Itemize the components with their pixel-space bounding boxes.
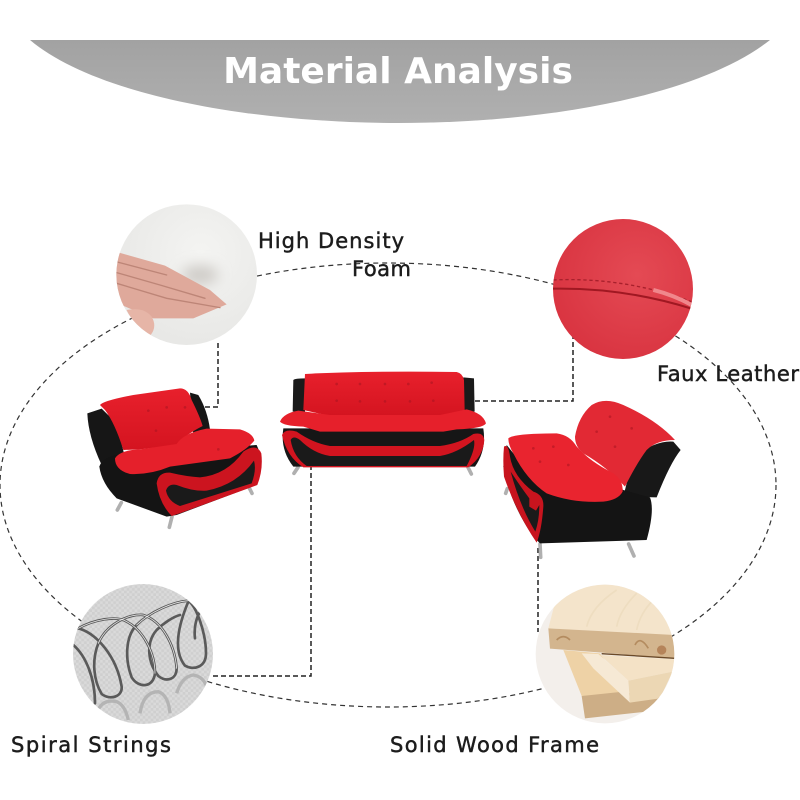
loveseat: [503, 401, 681, 557]
title text: Material Analysis: [223, 51, 573, 92]
label: faux leather: Faux Leather: [657, 362, 799, 386]
label: high density foam: Foam: [352, 257, 411, 281]
dashed oval linking the materials: [0, 263, 776, 707]
title banner: [30, 40, 770, 123]
icon: hand pressing foam: [113, 251, 227, 335]
lower left plank: [564, 650, 619, 696]
sofa: [280, 372, 486, 474]
label: solid wood frame: Solid Wood Frame: [390, 733, 599, 757]
material circle: solid wood: [536, 583, 677, 723]
label: high density foam: High Density: [258, 229, 404, 253]
top plank face: [548, 583, 677, 636]
label: spiral strings: Spiral Strings: [11, 733, 171, 757]
material circle: faux leather: [553, 219, 693, 359]
lower right plank: [582, 653, 630, 703]
material circle: spiral strings: [73, 584, 213, 724]
connector lines: [185, 336, 573, 676]
armchair: [87, 388, 262, 527]
icon: coil spring: [73, 601, 206, 703]
top plank end grain: [548, 628, 675, 658]
material circle: high density foam: [113, 204, 257, 345]
